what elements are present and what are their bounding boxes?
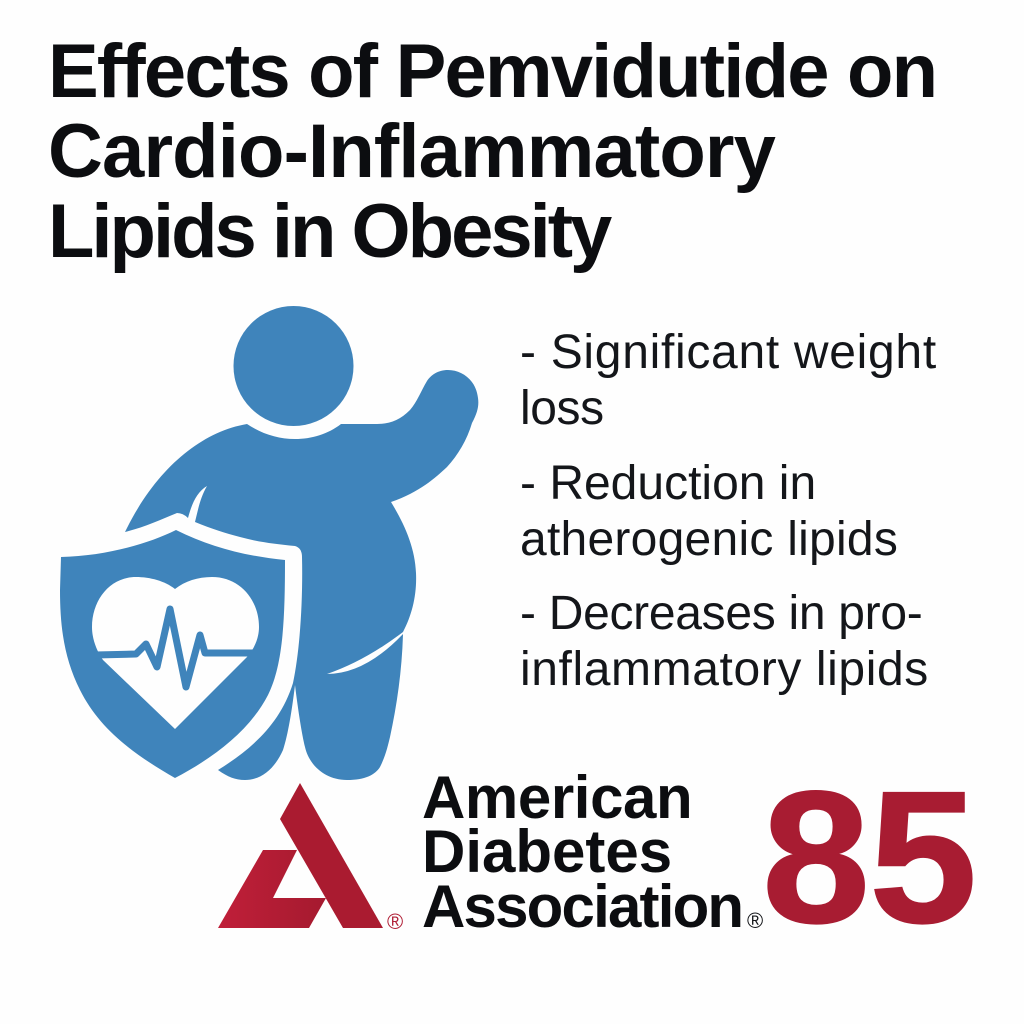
bullet list: - Significant weight xyxy=(520,326,937,379)
bullet list: - Reduction in xyxy=(520,457,816,510)
organisation name: ® xyxy=(747,908,763,933)
organisation name xyxy=(422,764,763,940)
bullet list: atherogenic lipids xyxy=(520,513,898,566)
icon: ECG line xyxy=(95,609,258,687)
icon: shield xyxy=(60,530,285,778)
title: Effects of Pemvidutide on xyxy=(48,29,936,114)
icon: person with heart shield xyxy=(60,306,478,780)
icon: heart xyxy=(92,577,259,729)
organisation name: Association xyxy=(422,873,742,940)
title: Lipids in Obesity xyxy=(48,189,609,274)
bullet list xyxy=(520,326,937,696)
bullet list: - Decreases in pro- xyxy=(520,587,922,640)
anniversary number 85: 85 xyxy=(762,752,976,962)
icon: ADA logo triangle: ® xyxy=(387,909,403,934)
bullet list: loss xyxy=(520,382,604,435)
icon: ADA logo triangle xyxy=(218,783,403,934)
organisation name: Diabetes xyxy=(422,818,672,885)
icon: person head xyxy=(234,306,354,426)
icon: person body xyxy=(125,370,478,780)
organisation name: American xyxy=(422,764,692,831)
title: Cardio-Inflammatory xyxy=(48,109,775,194)
title xyxy=(48,29,936,274)
bullet list: inflammatory lipids xyxy=(520,643,929,696)
